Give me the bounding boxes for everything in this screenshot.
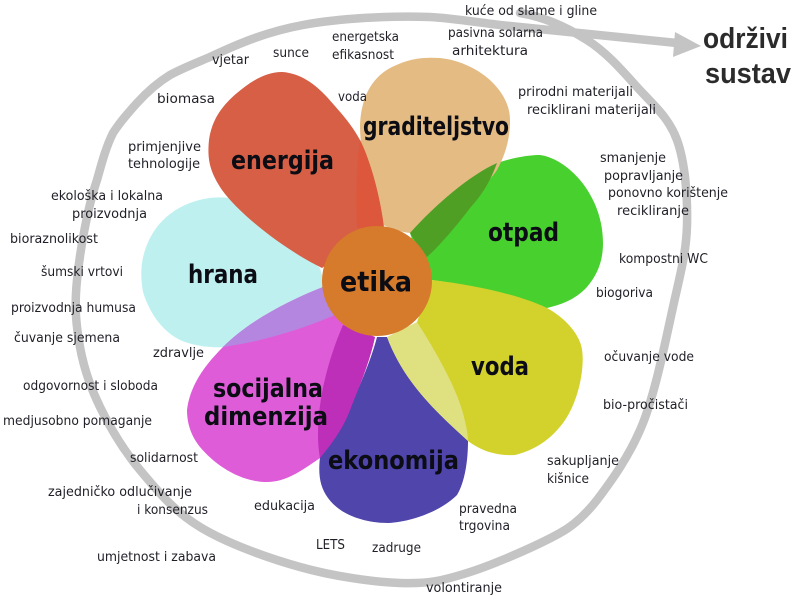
petal labels: ekonomija (328, 446, 459, 476)
surrounding small labels: left: primjenjive (128, 139, 201, 155)
overlap: voda and ekonomija (387, 322, 468, 441)
surrounding small labels: bottom: LETS (316, 537, 345, 553)
surrounding small labels: left: tehnologije (128, 156, 200, 172)
petal: voda (417, 280, 583, 455)
surrounding small labels: right: biogoriva (596, 285, 653, 301)
petal labels: dimenzija (204, 402, 328, 432)
surrounding small labels: bottom: edukacija (254, 498, 315, 514)
petal labels: voda (471, 352, 529, 382)
petal labels: energija (231, 146, 334, 176)
surrounding small labels: top: vjetar (212, 52, 249, 68)
surrounding small labels: bottom (254, 498, 517, 596)
surrounding small labels: left: zajedničko odlučivanje (48, 484, 192, 500)
surrounding small labels: right: sakupljanje (547, 453, 619, 469)
surrounding small labels: bottom: pravedna (459, 501, 517, 517)
surrounding small labels: right: kišnice (547, 471, 589, 487)
petal: energija (208, 72, 384, 268)
centre circle: etika: etika (340, 265, 412, 298)
surrounding small labels: right: smanjenje (600, 150, 666, 166)
surrounding small labels: top: voda (338, 89, 367, 105)
surrounding small labels: left: i konsenzus (137, 502, 208, 518)
surrounding small labels: top: energetska (332, 29, 399, 45)
surrounding small labels: left: proizvodnja humusa (11, 300, 136, 316)
surrounding small labels: top: arhitektura (452, 43, 528, 59)
surrounding small labels: right: popravljanje (604, 168, 683, 184)
surrounding small labels: left: šumski vrtovi (41, 264, 123, 280)
petal labels (188, 112, 559, 476)
surrounding small labels: top: biomasa (157, 91, 215, 107)
surrounding small labels: right: kompostni WC (619, 251, 708, 267)
petal labels: hrana (188, 260, 258, 290)
petal: graditeljstvo (360, 58, 510, 233)
surrounding small labels: left (3, 139, 216, 565)
heading: održivi sustav: sustav (705, 58, 791, 90)
outer loop and arrow (76, 13, 701, 583)
overlap: socijalna and ekonomija (318, 325, 375, 458)
surrounding small labels: top: sunce (273, 45, 309, 61)
surrounding small labels: top: reciklirani materijali (527, 102, 656, 118)
surrounding small labels: left: odgovornost i sloboda (23, 378, 158, 394)
surrounding small labels: top: efikasnost (332, 47, 394, 63)
surrounding small labels: left: zdravlje (153, 345, 204, 361)
surrounding small labels: bottom: trgovina (459, 518, 510, 534)
surrounding small labels: right: recikliranje (617, 203, 689, 219)
petal labels: socijalna (213, 374, 323, 404)
surrounding small labels: left: umjetnost i zabava (97, 549, 216, 565)
surrounding small labels: left: medjusobno pomaganje (3, 413, 152, 429)
surrounding small labels: right: bio-pročistači (603, 397, 688, 413)
centre circle: etika (322, 226, 432, 336)
heading: održivi sustav: održivi (703, 23, 788, 55)
surrounding small labels: left: solidarnost (130, 450, 198, 466)
surrounding small labels: left: bioraznolikost (10, 231, 98, 247)
surrounding small labels: left: proizvodnja (72, 206, 147, 222)
petal labels: otpad (488, 218, 559, 248)
overlap: graditeljstvo and otpad (410, 163, 497, 257)
surrounding small labels: left: ekološka i lokalna (51, 188, 163, 204)
surrounding small labels: right (547, 150, 728, 487)
petal: socijalna dimenzija (187, 287, 375, 482)
surrounding small labels: right: očuvanje vode (604, 349, 694, 365)
overlap: hrana and socijalna (223, 287, 335, 347)
surrounding small labels: top (157, 3, 656, 118)
overlap: energija and graditeljstvo (356, 140, 384, 228)
surrounding small labels: top: pasivna solarna (448, 25, 543, 41)
petal: ekonomija (319, 337, 468, 523)
petal: hrana (141, 197, 333, 347)
surrounding small labels: right: ponovno korištenje (608, 185, 728, 201)
petal: otpad (410, 155, 603, 308)
surrounding small labels: left: čuvanje sjemena (14, 330, 120, 346)
surrounding small labels: top: kuće od slame i gline (465, 3, 597, 19)
petal labels: graditeljstvo (363, 112, 509, 142)
heading: održivi sustav (703, 23, 791, 90)
surrounding small labels: bottom: volontiranje (426, 580, 502, 596)
surrounding small labels: top: prirodni materijali (518, 84, 633, 100)
surrounding small labels: bottom: zadruge (372, 540, 421, 556)
